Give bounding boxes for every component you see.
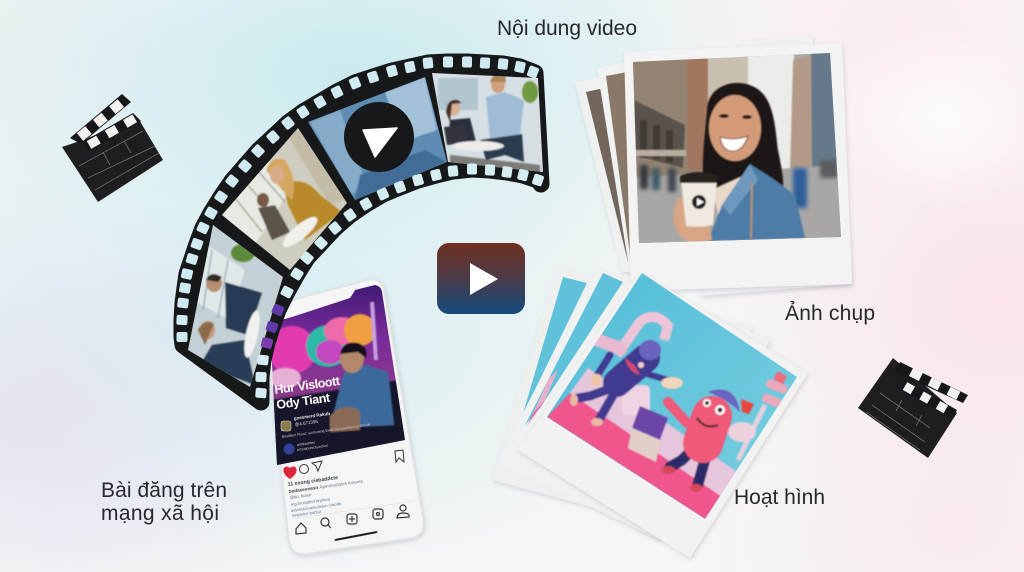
film frame: blue office with play button [305,75,450,205]
label: social media posts: Bài đăng trên [101,479,227,502]
phone body [264,279,424,554]
post account: uncliaontes [297,440,315,447]
film play icon [344,102,414,172]
post account: gnesmerd Rakub [293,411,331,421]
back polaroid peeks [575,36,850,296]
film frame: office conversation [430,70,545,175]
caption text: @bo. bosur [289,492,312,500]
post account: nchospotschyeclum [297,444,328,452]
phone action icons [283,450,404,479]
film base [182,62,541,402]
back cartoon polaroids [492,267,770,540]
polaroid stack: street portrait [575,36,852,296]
clapperboard left [62,94,163,202]
phone navigation bar [292,501,415,540]
pink character [668,402,712,484]
main polaroid frame [624,43,852,291]
caption text: mg.brusptied Itrpthed [290,496,331,507]
post image: Ody Tiant [275,390,332,412]
caption text: 11 esong ciebaddcte [287,475,339,488]
machine [632,406,668,440]
clapperboard right [858,358,968,458]
film perforations: inner [255,164,544,398]
film perforations: outer [176,56,540,342]
cartoon scene [540,270,800,525]
caption text: aubmoicioasudiston clacide [290,501,343,513]
polaroid stack: cartoon [492,267,808,558]
purple character [578,355,668,418]
label: photos: Ảnh chụp [785,302,875,325]
caption text [287,475,364,518]
post account [281,411,372,454]
main photo: woman with coffee cup [630,50,845,245]
film strip [176,56,545,402]
post headline: Hur Visloott [273,374,342,397]
post image [272,285,405,465]
film frame: meeting with plate [188,225,283,387]
central play button [437,243,525,314]
label: animation: Hoạt hình [734,486,825,509]
woman [674,83,805,242]
smartphone with social post [262,279,424,554]
post account: Bristillect Floud: surmosing Evele Aø poonton ros Emoki. [282,422,372,439]
film frame: woman in mustard [220,125,350,275]
label: video content: Nội dung video [497,17,637,40]
main cartoon polaroid frame [518,272,808,558]
caption text: sospetos bahtur [291,509,322,518]
label: social media posts: mạng xã hội [101,502,219,525]
caption text: bodaseonesn Apentsodales timents [288,479,364,494]
post account: @4.671395 [294,419,319,427]
